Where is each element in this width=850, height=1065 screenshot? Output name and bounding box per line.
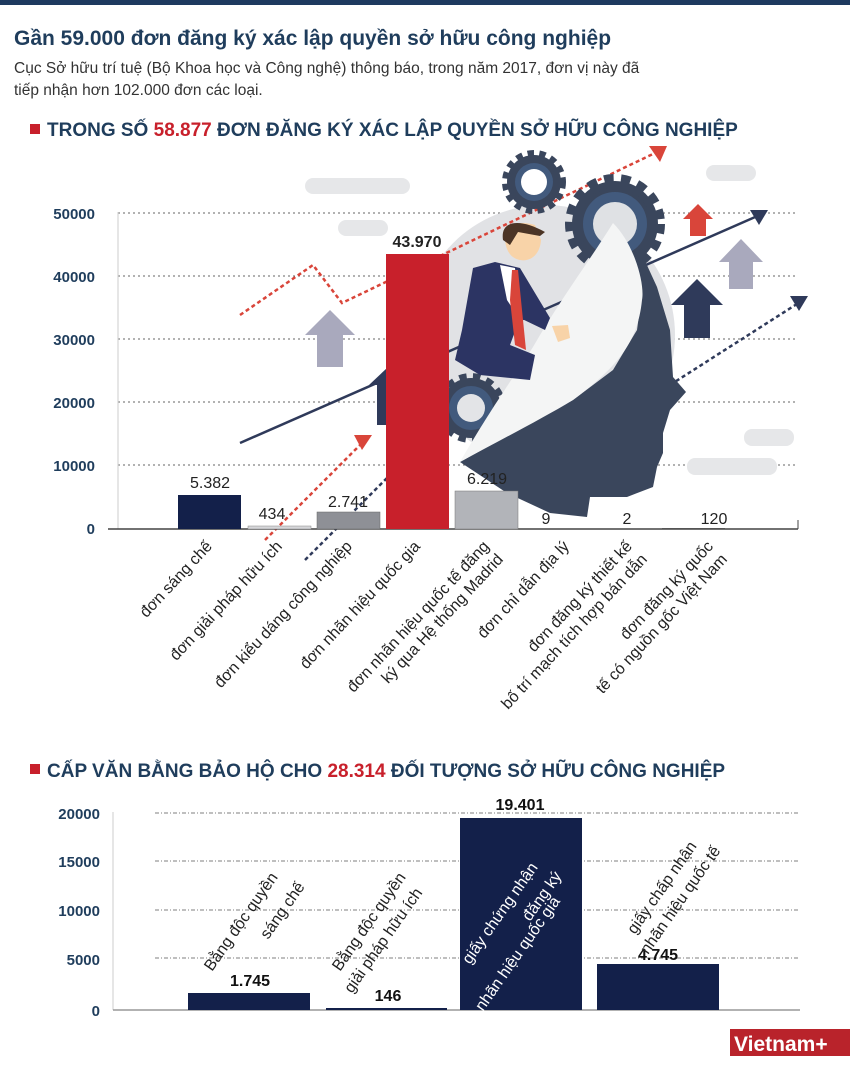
chart 1 gridlines xyxy=(118,213,798,465)
y axis labels 2: 20000 xyxy=(58,806,100,823)
y axis labels: 0 xyxy=(87,521,95,538)
y axis labels: 50000 xyxy=(53,206,95,223)
big gear xyxy=(572,181,658,267)
bar labels 2: Bằng độc quyền xyxy=(200,869,282,974)
arrows xyxy=(240,153,800,560)
bar labels 2: Bằng độc quyền xyxy=(328,869,410,974)
gears xyxy=(441,155,561,438)
category labels: đơn chỉ dẫn địa lý xyxy=(473,537,573,642)
man figure xyxy=(455,223,570,380)
category labels: đơn đăng ký quốc xyxy=(617,538,717,643)
bars xyxy=(178,495,241,529)
y axis labels: 40000 xyxy=(53,269,95,286)
category labels: đơn sáng chế xyxy=(137,538,216,621)
category labels xyxy=(137,537,731,713)
value labels: 434 xyxy=(259,506,285,523)
chart 2: granted protection: 146 xyxy=(375,988,401,1005)
category labels: tế có nguồn gốc Việt Nam xyxy=(593,551,731,697)
subtitle: Cục Sở hữu trí tuệ (Bộ Khoa học và Công nghệ) thông báo, trong năm 2017, đơn vị này đã xyxy=(14,60,640,77)
y axis labels: 30000 xyxy=(53,332,95,349)
value labels xyxy=(190,234,727,528)
y axis labels: 20000 xyxy=(53,395,95,412)
logo xyxy=(730,1029,850,1056)
title: Gần 59.000 đơn đăng ký xác lập quyền sở hữu công nghiệp xyxy=(14,27,611,50)
bar labels 2: giấy chấp nhận xyxy=(624,839,701,937)
bar labels 2: nhãn hiệu quốc gia xyxy=(472,894,564,1014)
chart 2: granted protection: 1.745 xyxy=(230,973,270,990)
value labels: 9 xyxy=(542,511,551,528)
y axis labels: 10000 xyxy=(53,458,95,475)
bar labels 2: nhãn hiệu quốc tế xyxy=(637,843,724,957)
value labels: 120 xyxy=(701,511,727,528)
bar labels 2: giải pháp hữu ích xyxy=(341,885,426,996)
bar labels 2: sáng chế xyxy=(257,879,309,942)
y axis labels xyxy=(53,206,95,538)
y axis labels 2 xyxy=(58,806,100,1020)
bar labels 2 xyxy=(200,839,724,1014)
value labels: 5.382 xyxy=(190,475,230,492)
y axis labels 2: 5000 xyxy=(67,952,100,969)
head silhouette xyxy=(460,224,686,517)
category labels: đơn nhãn hiệu quốc tế đăng xyxy=(344,538,493,696)
peeled paper xyxy=(460,223,643,462)
section heading 1: TRONG SỐ 58.877 ĐƠN ĐĂNG KÝ XÁC LẬP QUYỀN SỞ HỮU CÔNG NGHIỆP xyxy=(47,119,738,141)
category labels: đơn đăng ký thiết kế xyxy=(525,538,636,656)
value labels: 43.970 xyxy=(393,234,442,251)
illustration: head with gears and arrows xyxy=(240,146,808,560)
bar labels 2: đăng ký xyxy=(519,869,565,924)
chart 2: granted protection xyxy=(58,797,800,1020)
logo: Vietnam+ xyxy=(734,1033,828,1056)
subtitle: tiếp nhận hơn 102.000 đơn các loại. xyxy=(14,82,263,99)
chart 2: granted protection: 19.401 xyxy=(496,797,545,814)
category labels: đơn nhãn hiệu quốc gia xyxy=(297,538,424,673)
bars 2 xyxy=(188,993,310,1010)
chart 1: applications xyxy=(53,206,798,713)
category labels: ký qua Hệ thống Madrid xyxy=(379,551,507,687)
subtitle xyxy=(14,60,640,99)
y axis labels 2: 10000 xyxy=(58,903,100,920)
category labels: đơn giải pháp hữu ích xyxy=(167,538,286,664)
section heading 2: CẤP VĂN BẰNG BẢO HỘ CHO 28.314 ĐỐI TƯỢNG SỞ HỮU CÔNG NGHIỆP xyxy=(47,760,725,782)
bar labels 2: giấy chứng nhận xyxy=(459,860,542,967)
category labels: bố trí mạch tích hợp bán dẫn xyxy=(497,550,651,713)
y axis labels 2: 15000 xyxy=(58,854,100,871)
value labels: 2 xyxy=(623,511,632,528)
value labels: 2.741 xyxy=(328,494,368,511)
category labels: đơn kiểu dáng công nghiệp xyxy=(211,537,356,691)
chart 2: granted protection: 4.745 xyxy=(638,947,678,964)
y axis labels 2: 0 xyxy=(92,1003,100,1020)
value labels: 6.219 xyxy=(467,471,507,488)
